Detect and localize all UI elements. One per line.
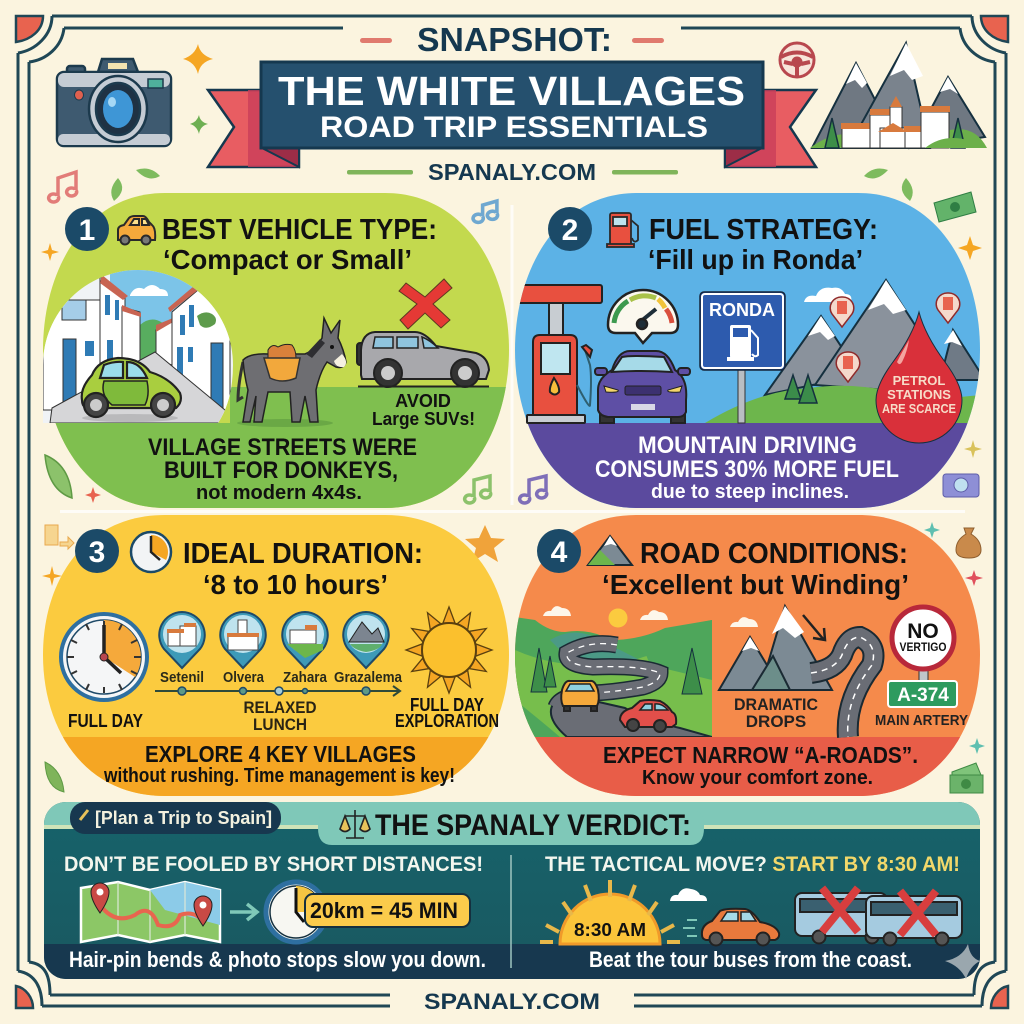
heading 4: ROAD CONDITIONS: — [640, 538, 908, 570]
callout: 20km = 45 min: 20km = 45 MIN — [310, 898, 458, 923]
number badge 1: 1 — [79, 214, 95, 247]
heading: snapshot: SNAPSHOT: — [417, 21, 612, 58]
trees — [785, 375, 817, 403]
heading 4: ‘Excellent but Winding’ — [602, 569, 909, 600]
dramatic drops label: DRAMATIC — [734, 695, 818, 714]
illustration: dramatic drops mountains — [719, 606, 832, 690]
illustration: purple car — [595, 351, 690, 423]
icon: green sparkle — [190, 115, 208, 134]
icon: clock — [266, 882, 326, 942]
winding road — [811, 637, 874, 737]
icon: red cross — [399, 279, 452, 329]
panel 3 caption — [103, 741, 455, 787]
icon: folded map — [81, 882, 220, 942]
panel 1 caption: VILLAGE STREETS WERE — [148, 434, 417, 461]
title banner: ROAD TRIP ESSENTIALS — [320, 111, 708, 144]
panel 4 caption: Know your comfort zone. — [642, 767, 873, 789]
left caption: Hair-pin bends & photo stops slow you down. — [69, 947, 486, 972]
illustration: mountains with pins — [765, 280, 985, 395]
main artery label: MAIN ARTERY — [875, 712, 968, 729]
heading 1: BEST VEHICLE TYPE: — [162, 214, 437, 246]
avoid label: Large SUVs! — [372, 409, 475, 429]
illustration: petrol station — [510, 285, 602, 423]
dramatic drops label: DROPS — [746, 712, 806, 731]
A-374 road sign: A-374 — [897, 685, 949, 706]
right caption: Beat the tour buses from the coast. — [589, 947, 912, 972]
icon: rising sun 8:30 AM: 8:30 AM — [574, 920, 646, 940]
right headline: THE TACTICAL MOVE? START BY 8:30 AM! — [545, 853, 960, 876]
icon: fuel gauge — [608, 290, 678, 343]
icon: cloud — [670, 888, 707, 901]
sparkle — [945, 944, 980, 979]
heading 2: FUEL STRATEGY: — [649, 214, 878, 246]
icon: small car — [118, 216, 155, 244]
illustration: mountains and village — [810, 43, 987, 148]
no vertigo sign — [892, 607, 954, 682]
footer website label: SPANALY.COM — [424, 989, 600, 1014]
village pins and timeline: Grazalema — [334, 670, 403, 686]
link pill: [Plan a Trip to Spain] — [95, 808, 272, 828]
icon: yellow car — [561, 681, 599, 711]
dramatic drops label — [734, 695, 818, 731]
heading: snapshot — [360, 21, 664, 58]
left headline: DON’T BE FOOLED BY SHORT DISTANCES! — [64, 853, 483, 876]
link pill — [70, 802, 281, 834]
clouds and sun — [543, 606, 758, 628]
panel 1: best vehicle type — [43, 193, 509, 508]
panel 2 caption: due to steep inclines. — [651, 481, 849, 503]
red drop callout: ARE SCARCE — [882, 401, 956, 416]
road sign: Ronda — [700, 292, 785, 423]
panel 1 caption: BUILT FOR DONKEYS, — [164, 457, 398, 484]
illustration: village street with small car — [43, 270, 233, 423]
arrow: dramatic drop — [803, 615, 825, 640]
callout: 20km = 45 min — [305, 894, 470, 927]
heading 1 — [162, 214, 437, 275]
title banner — [208, 62, 816, 167]
icon: smart car — [82, 358, 181, 417]
relaxed lunch label: RELAXED — [244, 698, 316, 717]
floating decorations top — [49, 168, 913, 202]
title banner: THE WHITE VILLAGES — [278, 68, 745, 114]
icon: crossed out tour buses — [795, 888, 962, 946]
panel 3: ideal duration — [43, 515, 509, 796]
heading 2: ‘Fill up in Ronda’ — [648, 244, 863, 275]
number badge 4: 4 — [551, 536, 568, 569]
panel 2 caption: MOUNTAIN DRIVING — [638, 432, 857, 459]
panel 3 caption: without rushing. Time management is key! — [103, 765, 455, 787]
heading 4 — [602, 538, 909, 600]
website label: SPANALY.COM — [428, 159, 596, 185]
heading 3 — [183, 538, 423, 600]
avoid label — [372, 391, 475, 429]
number badge 1 — [65, 207, 109, 251]
panel 3 caption: EXPLORE 4 KEY VILLAGES — [145, 741, 416, 767]
red drop callout — [876, 312, 962, 443]
red drop callout: PETROL — [893, 373, 945, 388]
panel 1 caption — [148, 434, 417, 504]
pin: Grazalema — [343, 612, 389, 668]
village pins and timeline: Zahara — [283, 670, 328, 686]
no vertigo sign: NO — [907, 620, 939, 643]
panel 2: fuel strategy — [510, 193, 985, 508]
heading 3: IDEAL DURATION: — [183, 538, 423, 570]
icon: red car — [620, 700, 676, 732]
village pins and timeline: Olvera — [223, 670, 265, 686]
icon: camera — [57, 59, 171, 146]
icon: sun — [406, 607, 492, 693]
verdict heading: THE SPANALY VERDICT: — [375, 809, 691, 842]
full day exploration label: FULL DAY — [410, 695, 484, 715]
illustration: large SUV — [357, 332, 489, 387]
panel 2 caption: CONSUMES 30% MORE FUEL — [595, 456, 899, 483]
full day exploration label: EXPLORATION — [395, 711, 499, 731]
pin: Setenil — [159, 612, 205, 668]
relaxed lunch label: LUNCH — [253, 715, 307, 734]
A-374 road sign — [888, 681, 957, 707]
number badge 2 — [548, 207, 592, 251]
panel 2 caption — [595, 432, 899, 503]
icon: mountain — [588, 536, 632, 565]
village pins and timeline: Setenil — [160, 670, 204, 686]
arrow: map to clock — [230, 904, 257, 920]
pin: Zahara — [282, 612, 328, 668]
icon: small clock — [131, 532, 171, 572]
panel 4: road conditions — [515, 515, 980, 796]
panel 4 caption: EXPECT NARROW “A-ROADS”. — [603, 742, 918, 768]
heading 3: ‘8 to 10 hours’ — [203, 569, 388, 600]
red drop callout: STATIONS — [887, 387, 951, 402]
divider — [510, 855, 512, 968]
village pins and timeline — [155, 612, 403, 696]
website label — [347, 159, 678, 185]
full day exploration label — [395, 695, 499, 731]
icon: orange star — [183, 44, 213, 74]
fuel pins — [830, 293, 960, 382]
speed lines — [683, 920, 697, 936]
icon: large clock — [61, 614, 147, 700]
pin: Olvera — [220, 612, 266, 668]
icon: rising sun 8:30 AM — [540, 880, 680, 944]
panel: the Spanaly verdict — [44, 802, 980, 979]
no vertigo sign: VERTIGO — [900, 642, 947, 654]
icon: orange car — [702, 909, 779, 946]
icon: cloud — [804, 288, 851, 302]
road sign: Ronda: RONDA — [709, 300, 775, 320]
panel 1 caption: not modern 4x4s. — [196, 482, 362, 504]
avoid label: AVOID — [395, 391, 451, 411]
panel separators — [60, 205, 965, 512]
number badge 2: 2 — [562, 214, 578, 247]
number badge 3: 3 — [89, 536, 105, 569]
icon: steering wheel — [780, 43, 814, 77]
heading 2 — [648, 214, 878, 275]
side decorations middle — [41, 192, 985, 793]
illustration: winding road landscape — [515, 617, 712, 737]
icon: fuel pump — [607, 213, 638, 247]
relaxed lunch label — [244, 698, 316, 734]
number badge 4 — [537, 529, 581, 573]
panel 4 caption — [603, 742, 918, 789]
illustration: donkey with basket — [237, 318, 346, 427]
full day label: FULL DAY — [68, 711, 143, 731]
heading 1: ‘Compact or Small’ — [163, 244, 412, 275]
number badge 3 — [75, 529, 119, 573]
